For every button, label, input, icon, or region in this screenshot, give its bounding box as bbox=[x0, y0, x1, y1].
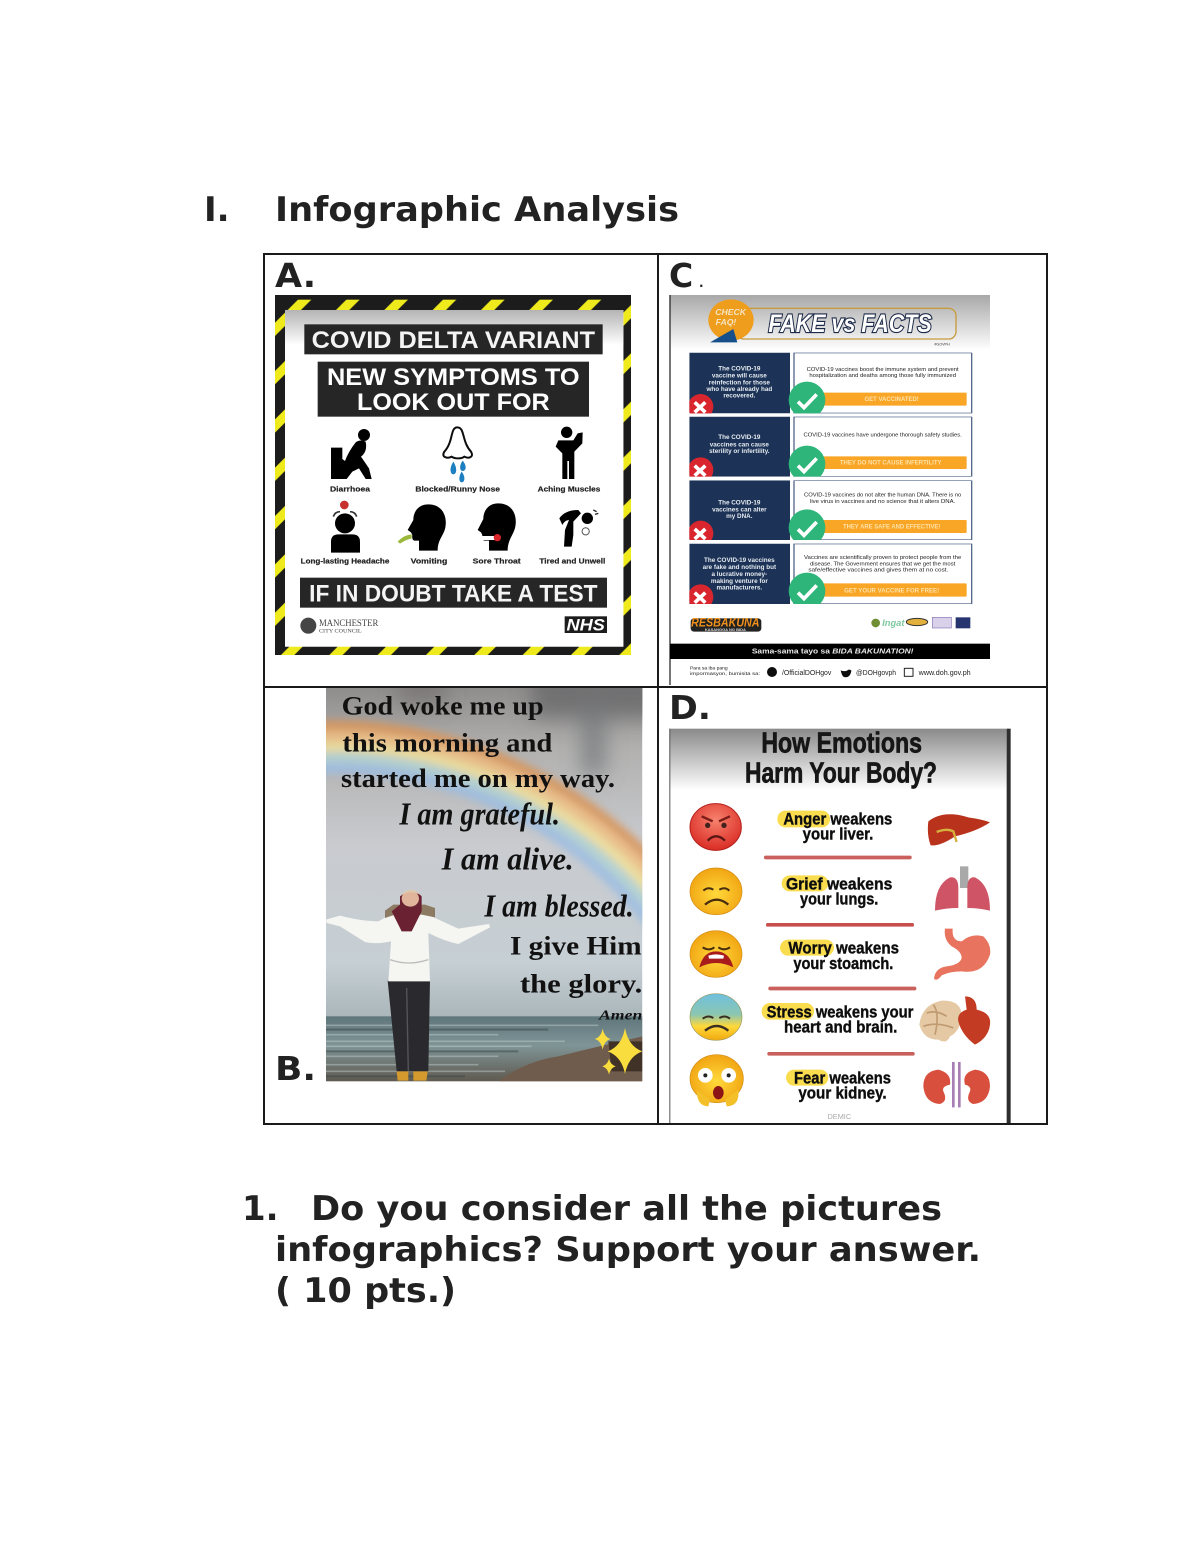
label B: B. bbox=[275, 1049, 316, 1088]
row 4: myth and fact: manufacturers. bbox=[716, 585, 762, 592]
row: grief bbox=[690, 866, 990, 927]
rainbow bbox=[326, 716, 642, 928]
row 4: myth and fact: disease. The Government ensures that we get the most bbox=[810, 561, 956, 567]
slogan bar bbox=[670, 644, 990, 659]
logo: manchester city council: CITY COUNCIL bbox=[319, 629, 362, 635]
logo: NHS: NHS bbox=[566, 616, 605, 635]
quote text: I am alive. bbox=[441, 842, 574, 877]
row 1: myth and fact: The COVID-19 bbox=[718, 366, 761, 373]
row 3: myth and fact bbox=[688, 480, 972, 546]
banner: covid delta variant: COVID DELTA VARIANT bbox=[312, 327, 595, 354]
row: fear: Fear weakens bbox=[794, 1069, 891, 1088]
row: stress: heart and brain. bbox=[784, 1017, 897, 1036]
row 1: myth and fact: hospitalization and deaths among those fully immunized bbox=[809, 373, 956, 379]
question 1: ( 10 pts.) bbox=[275, 1271, 456, 1311]
header: fake vs facts: FAKE vs FACTS bbox=[768, 310, 932, 338]
row 2: myth and fact bbox=[688, 417, 972, 483]
row: worry bbox=[690, 929, 990, 990]
header: fake vs facts: #GOVPH bbox=[934, 343, 950, 347]
row 3: myth and fact: my DNA. bbox=[726, 513, 753, 520]
row 1: myth and fact: GET VACCINATED! bbox=[865, 397, 919, 403]
quote text: I give Him bbox=[510, 932, 642, 961]
symptom captions: Sore Throat bbox=[473, 556, 521, 565]
quote text: the glory. bbox=[520, 969, 642, 998]
banner: if in doubt: IF IN DOUBT TAKE A TEST bbox=[309, 580, 598, 607]
row 2: myth and fact: sterility or infertility. bbox=[709, 448, 770, 455]
row 1: myth and fact: recovered. bbox=[723, 393, 756, 400]
row 1: myth and fact: vaccine will cause bbox=[712, 372, 767, 379]
question 1: infographics? Support your answer. bbox=[275, 1230, 981, 1270]
row: stress: Stress weakens your bbox=[767, 1002, 914, 1021]
question 1: Do you consider all the pictures bbox=[311, 1189, 942, 1229]
row 4: myth and fact: GET YOUR VACCINE FOR FREE! bbox=[844, 588, 939, 594]
logo: resbakuna: KASANGGA NG BIDA bbox=[705, 627, 746, 632]
row: anger: your liver. bbox=[803, 825, 873, 844]
row 4: myth and fact: Vaccines are scientifically proven to protect people from the bbox=[804, 555, 961, 561]
row 3: myth and fact: THEY ARE SAFE AND EFFECTIVE! bbox=[843, 524, 940, 530]
row 1: myth and fact: reinfection for those bbox=[709, 379, 770, 386]
title: Harm Your Body? bbox=[745, 757, 937, 789]
row: stress bbox=[690, 994, 990, 1056]
social footer: @DOHgovph bbox=[856, 668, 896, 677]
row 4: myth and fact: safe/effective vaccines and gives them at no cost. bbox=[808, 568, 949, 574]
partner logos: Ingat bbox=[882, 618, 905, 628]
row 4: myth and fact: a lucrative money- bbox=[712, 571, 767, 578]
section heading: I. bbox=[204, 190, 230, 230]
label C: . bbox=[699, 276, 704, 290]
symptom captions bbox=[301, 485, 605, 565]
row 1: myth and fact: COVID-19 vaccines boost the immune system and prevent bbox=[807, 367, 959, 373]
symptom captions: Blocked/Runny Nose bbox=[415, 485, 500, 494]
row 2: myth and fact: The COVID-19 bbox=[718, 434, 761, 441]
logo: manchester city council bbox=[300, 618, 379, 635]
social footer: impormasyon, bumisita sa: bbox=[690, 671, 760, 677]
row: fear bbox=[690, 1055, 990, 1121]
section heading: Infographic Analysis bbox=[275, 190, 679, 230]
title: How Emotions bbox=[761, 728, 922, 760]
social footer: /OfficialDOHgov bbox=[782, 668, 832, 677]
banner: new symptoms: LOOK OUT FOR bbox=[357, 389, 550, 416]
logo: resbakuna: RESBAKUNA bbox=[691, 615, 759, 629]
row: worry: Worry weakens bbox=[788, 939, 899, 958]
row 4: myth and fact: making venture for bbox=[711, 578, 768, 585]
symptom captions: Vomiting bbox=[411, 556, 448, 565]
comparison table grid bbox=[264, 254, 1047, 1124]
social footer: www.doh.gov.ph bbox=[918, 668, 971, 677]
woman with raised arms bbox=[326, 890, 490, 1081]
label A: A. bbox=[275, 256, 316, 295]
title bbox=[745, 728, 937, 789]
row: fear: your kidney. bbox=[798, 1084, 887, 1103]
header: fake vs facts: CHECK bbox=[715, 307, 747, 317]
row: grief: your lungs. bbox=[800, 890, 878, 909]
partner logos bbox=[871, 617, 970, 628]
banner: new symptoms bbox=[318, 362, 589, 417]
panel A: covid delta variant poster bbox=[275, 295, 631, 655]
logo: manchester city council: MANCHESTER bbox=[319, 619, 379, 629]
dark waterfall streaks bbox=[394, 688, 642, 784]
row: anger bbox=[690, 804, 990, 859]
symptom captions: Tired and Unwell bbox=[539, 556, 605, 565]
social footer bbox=[690, 665, 971, 677]
icon: tired and unwell bbox=[559, 510, 598, 547]
header: fake vs facts: FAQ! bbox=[716, 317, 736, 327]
row 3: myth and fact: live virus in vaccines and no science that it alters DNA. bbox=[810, 499, 956, 505]
symptom captions: Diarrhoea bbox=[330, 485, 371, 494]
icon: vomiting bbox=[398, 504, 446, 551]
header: fake vs facts bbox=[708, 299, 956, 347]
banner: new symptoms: NEW SYMPTOMS TO bbox=[327, 364, 580, 391]
symptom captions: Long-lasting Headache bbox=[301, 556, 389, 565]
label C: C bbox=[669, 256, 693, 295]
panel C: fake vs facts poster bbox=[669, 295, 990, 685]
quote text: Amen bbox=[598, 1009, 643, 1024]
row 3: myth and fact: COVID-19 vaccines do not alter the human DNA. There is no bbox=[804, 493, 961, 499]
row 4: myth and fact: The COVID-19 vaccines bbox=[704, 557, 775, 564]
row 2: myth and fact: THEY DO NOT CAUSE INFERTILITY bbox=[840, 460, 942, 466]
panel B: gratitude quote picture bbox=[326, 688, 990, 1104]
icon: runny nose bbox=[443, 427, 472, 482]
row: anger: Anger weakens bbox=[783, 810, 892, 829]
icon: diarrhoea bbox=[331, 429, 372, 479]
quote text bbox=[341, 692, 643, 1024]
label D: D. bbox=[669, 688, 711, 727]
row 4: myth and fact bbox=[688, 544, 972, 610]
row 2: myth and fact: COVID-19 vaccines have undergone thorough safety studies. bbox=[803, 433, 962, 439]
hazard stripe frame bbox=[275, 295, 631, 655]
row: fear: DEMIC bbox=[828, 1112, 852, 1121]
row: grief: Grief weakens bbox=[786, 874, 892, 893]
question 1: 1. bbox=[242, 1189, 279, 1229]
row: worry: your stoamch. bbox=[793, 954, 893, 973]
row 3: myth and fact: vaccines can alter bbox=[712, 506, 767, 513]
question 1 bbox=[242, 1189, 981, 1311]
quote text: I am blessed. bbox=[483, 888, 634, 923]
symptom captions: Aching Muscles bbox=[538, 485, 600, 494]
icon: sore throat bbox=[478, 503, 516, 551]
row 4: myth and fact: are fake and nothing but bbox=[703, 564, 777, 571]
row 1: myth and fact bbox=[688, 353, 972, 419]
row 3: myth and fact: The COVID-19 bbox=[718, 500, 761, 507]
icon: aching muscles bbox=[556, 427, 583, 479]
social footer: Para sa iba pang bbox=[690, 665, 728, 671]
quote text: I am grateful. bbox=[398, 797, 560, 832]
sea and shore bbox=[326, 1016, 642, 1081]
slogan bar: Sama-sama tayo sa BIDA BAKUNATION! bbox=[752, 647, 914, 656]
quote text: God woke me up bbox=[342, 692, 544, 721]
icon: headache bbox=[331, 501, 360, 553]
row 2: myth and fact: vaccines can cause bbox=[710, 441, 769, 448]
icon: sparkles bbox=[595, 1028, 642, 1075]
quote text: started me on my way. bbox=[341, 764, 615, 793]
quote text: this morning and bbox=[342, 728, 553, 757]
panel D: how emotions harm your body bbox=[669, 728, 1011, 1123]
row 1: myth and fact: who have already had bbox=[705, 386, 772, 393]
